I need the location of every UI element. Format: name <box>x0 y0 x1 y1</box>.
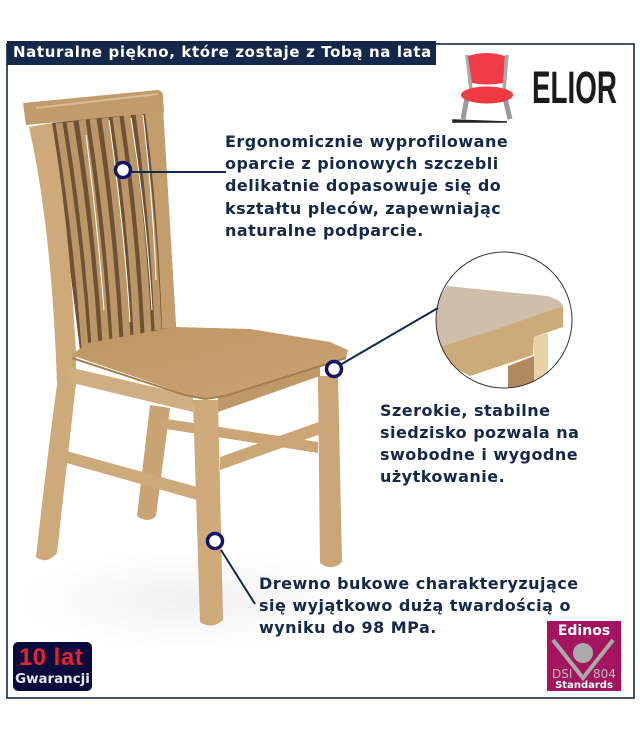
callout line: seat <box>340 308 438 365</box>
text: backrest: delikatnie dopasowuje się do <box>225 176 501 195</box>
left post and back leg <box>29 123 76 560</box>
text: seat: Szerokie, stabilne <box>380 401 550 420</box>
logo: Elior <box>453 53 617 122</box>
badge: Edinos standards: Standards <box>555 680 613 691</box>
badge: Edinos standards: DSI <box>552 667 572 681</box>
badge: Edinos standards: 804 <box>593 667 616 681</box>
seat <box>71 327 348 399</box>
text: backrest: naturalne podparcie. <box>225 221 424 240</box>
marker: backrest <box>116 162 130 178</box>
badge: Edinos standards: Edinos <box>558 623 610 639</box>
badge: Edinos standards <box>547 621 621 691</box>
chair photo <box>20 90 360 650</box>
right front leg <box>318 376 342 567</box>
text: backrest: oparcie z pionowych szczebli <box>225 154 499 173</box>
right stretcher <box>220 418 332 470</box>
front leg <box>193 400 223 626</box>
badge: 10 year warranty: 10 lat <box>19 644 83 671</box>
callout line: wood <box>221 550 255 604</box>
text: wood: Drewno bukowe charakteryzujące <box>259 574 579 593</box>
text: wood: się wyjątkowo dużą twardością o <box>259 596 571 615</box>
text: seat: siedzisko pozwala na <box>380 423 579 442</box>
marker: seat <box>326 362 342 376</box>
badge: 10 year warranty: Gwarancji <box>15 672 90 687</box>
title: Naturalne piękno, które zostaje z Tobą na lata <box>13 43 432 61</box>
icon: red chair <box>453 53 513 122</box>
text: backrest: Ergonomicznie wyprofilowane <box>225 132 508 151</box>
white slat gaps <box>86 115 156 322</box>
callout line: backrest <box>131 171 226 173</box>
side stretcher <box>63 450 197 500</box>
top rail <box>23 90 164 125</box>
right post <box>145 110 176 329</box>
zoom circle: seat detail <box>425 252 572 392</box>
text: wood: wyniku do 98 MPa. <box>259 618 437 637</box>
slats <box>59 114 158 348</box>
left apron <box>68 367 193 412</box>
text: seat: swobodne i wygodne <box>380 445 578 464</box>
text: seat: użytkowanie. <box>380 467 505 486</box>
badge: 10 year warranty <box>13 642 92 691</box>
text: backrest: kształtu pleców, zapewniając <box>225 199 501 218</box>
back right leg <box>137 405 170 520</box>
backrest panel <box>52 110 176 350</box>
right apron <box>218 362 320 412</box>
marker: wood <box>208 534 222 548</box>
back stretcher <box>160 418 318 453</box>
